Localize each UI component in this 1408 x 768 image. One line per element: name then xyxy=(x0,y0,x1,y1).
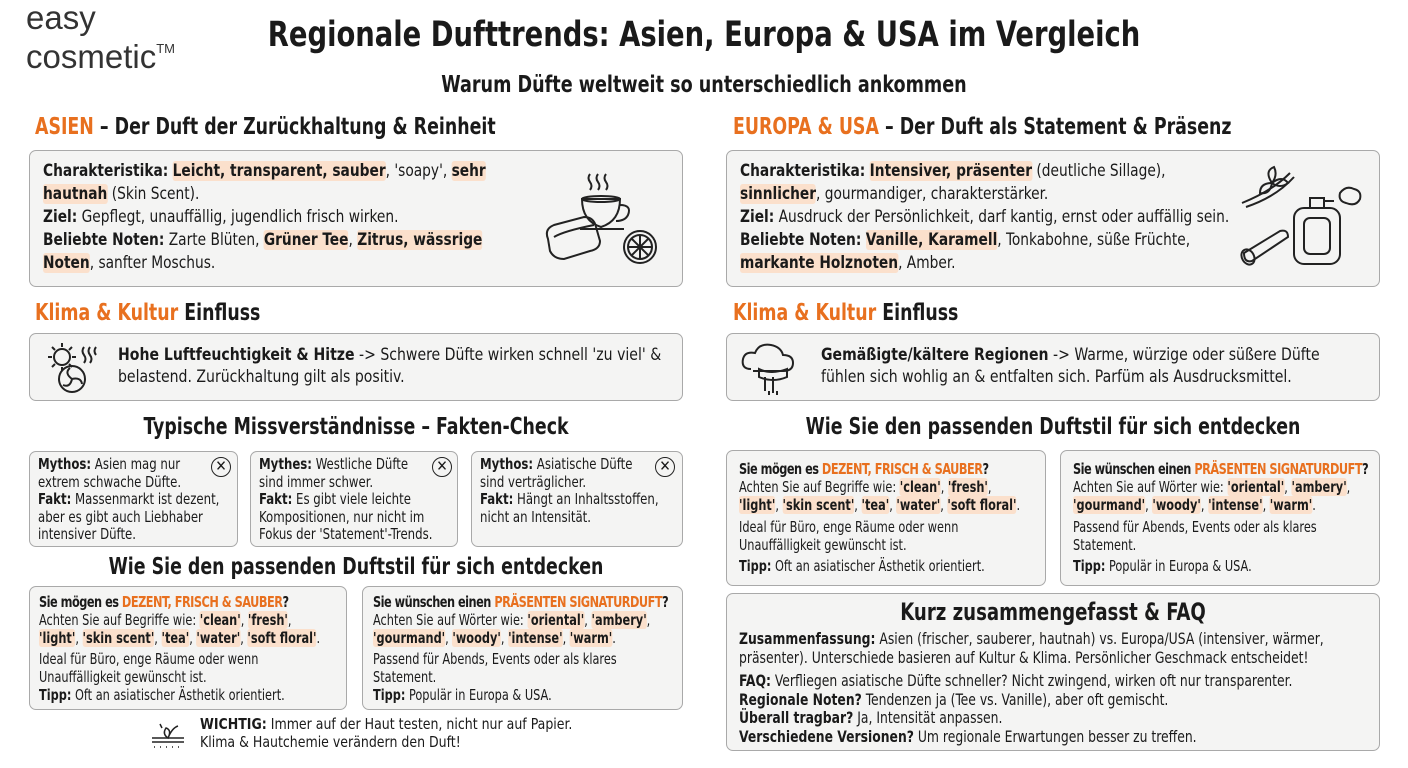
heading: Duftstil right: Wie Sie den passenden Duftstil für sich entdecken xyxy=(806,414,1300,440)
icon: x circle xyxy=(655,457,675,477)
box: präsent right xyxy=(1060,450,1380,586)
text: FAQ xyxy=(739,671,1292,746)
box: präsent left: Achten Sie auf Wörter wie: 'oriental', 'ambery', xyxy=(373,611,650,629)
box: dezent right: Tipp: Oft an asiatischer Ästhetik orientiert. xyxy=(739,557,985,575)
box: präsent left: Statement. xyxy=(373,668,436,686)
myth box 1 xyxy=(29,451,238,547)
text: Klima left: belastend. Zurückhaltung gilt als positiv. xyxy=(118,367,405,387)
box: dezent left: Ideal für Büro, enge Räume oder wenn xyxy=(39,650,258,668)
icon: sun and fan xyxy=(48,343,97,393)
subtitle: Warum Düfte weltweit so unterschiedlich ankommen xyxy=(441,72,967,98)
heading: Klima left: Klima & Kultur Einfluss xyxy=(35,300,260,326)
box: dezent right: 'light', 'skin scent', 'tea', 'water', 'soft floral'. xyxy=(739,496,1020,514)
heading: Europa: EUROPA & USA – Der Duft als Statement & Präsenz xyxy=(733,114,1232,140)
box: präsent right: Sie wünschen einen PRÄSENTEN SIGNATURDUFT? xyxy=(1073,460,1368,478)
text: Asien characteristics: Ziel: Gepflegt, unauffällig, jugendlich frisch wirken. xyxy=(43,207,398,227)
heading: Missverständnisse: Typische Missverständnisse – Fakten-Check xyxy=(143,414,569,440)
heading: Duftstil left: Wie Sie den passenden Duftstil für sich entdecken xyxy=(109,554,603,580)
icon: tea cup towel citrus xyxy=(546,173,657,264)
text: Europa characteristics: Ziel: Ausdruck der Persönlichkeit, darf kantig, ernst oder auffällig sein. xyxy=(740,207,1229,227)
myth box 1: Mythos: Asien mag nur xyxy=(38,455,180,473)
panel: Asien xyxy=(29,150,683,287)
box: dezent left: 'light', 'skin scent', 'tea', 'water', 'soft floral'. xyxy=(39,629,320,647)
text: Europa characteristics: Beliebte Noten: Vanille, Karamell, Tonkabohne, süße Früchte, xyxy=(740,230,1190,250)
logo: easy xyxy=(26,0,96,36)
box: dezent right: Unauffälligkeit gewünscht ist. xyxy=(739,536,907,554)
myth box 1: Fakt: Massenmarkt ist dezent, xyxy=(38,490,219,508)
text: FAQ: FAQ: Verfliegen asiatische Düfte schneller? Nicht zwingend, wirken oft nur transparenter. xyxy=(739,671,1292,690)
box: dezent left: Tipp: Oft an asiatischer Ästhetik orientiert. xyxy=(39,686,285,704)
heading: Klima right: Klima & Kultur Einfluss xyxy=(733,300,958,326)
myth box 2: Kompositionen, nur nicht im xyxy=(259,508,424,526)
box: präsent right: 'gourmand', 'woody', 'intense', 'warm'. xyxy=(1073,496,1316,514)
text: Europa characteristics: sinnlicher, gourmandiger, charakterstärker. xyxy=(740,184,1048,204)
myth box 2: Fakt: Es gibt viele leichte xyxy=(259,490,411,508)
box: präsent left: Sie wünschen einen PRÄSENTEN SIGNATURDUFT? xyxy=(373,593,668,611)
icon: x circle xyxy=(432,457,452,477)
text: Klima right: fühlen sich wohlig an & entfalten sich. Parfüm als Ausdrucksmittel. xyxy=(821,367,1292,387)
text: Klima right: Gemäßigte/kältere Regionen -> Warme, würzige oder süßere Düfte xyxy=(821,345,1320,365)
note: wichtig xyxy=(152,715,572,751)
box: dezent left: Achten Sie auf Begriffe wie: 'clean', 'fresh', xyxy=(39,611,291,629)
icon: x circle: ✕ xyxy=(436,457,448,475)
text: FAQ: Überall tragbar? Ja, Intensität anpassen. xyxy=(739,708,1002,727)
myth box 2: sind immer schwer. xyxy=(259,472,373,490)
note: wichtig: WICHTIG: Immer auf der Haut testen, nicht nur auf Papier. xyxy=(200,715,572,733)
panel: Klima right xyxy=(726,333,1380,401)
box: dezent right: Achten Sie auf Begriffe wie: 'clean', 'fresh', xyxy=(739,478,991,496)
heading: Asien: ASIEN – Der Duft der Zurückhaltung & Reinheit xyxy=(35,114,496,140)
box: dezent left xyxy=(29,586,347,710)
text: Klima left xyxy=(118,345,661,387)
panel: Klima left xyxy=(29,333,683,401)
panel: summary FAQ xyxy=(726,593,1380,751)
myth box 1: intensiver Düfte. xyxy=(38,525,136,543)
myth box 3: Fakt: Hängt an Inhaltsstoffen, xyxy=(480,490,659,508)
box: präsent right: Statement. xyxy=(1073,536,1136,554)
box: dezent right xyxy=(726,450,1046,586)
box: dezent right: Sie mögen es DEZENT, FRISCH & SAUBER? xyxy=(739,460,989,478)
myth box 3 xyxy=(471,451,683,547)
myth box 3: Mythos: Asiatische Düfte xyxy=(480,455,632,473)
myth box 3: sind verträglicher. xyxy=(480,472,586,490)
title: Regionale Dufttrends: Asien, Europa & USA im Vergleich xyxy=(268,15,1140,55)
text: summary: präsenter). Unterschiede basieren auf Kultur & Klima. Persönlicher Geschmack entscheidet! xyxy=(739,648,1308,667)
icon: cloud scarf xyxy=(742,344,794,395)
box: präsent left: Tipp: Populär in Europa & USA. xyxy=(373,686,552,704)
text: Klima right xyxy=(821,345,1320,387)
text: Asien characteristics xyxy=(43,161,486,273)
text: FAQ: Regionale Noten? Tendenzen ja (Tee vs. Vanille), aber oft gemischt. xyxy=(739,690,1168,708)
myth box 2: Fokus der 'Statement'-Trends. xyxy=(259,525,432,543)
text: Asien characteristics: Noten, sanfter Moschus. xyxy=(43,253,215,273)
box: präsent left: 'gourmand', 'woody', 'intense', 'warm'. xyxy=(373,629,616,647)
text: Europa characteristics xyxy=(740,161,1229,273)
text: Europa characteristics: markante Holznoten, Amber. xyxy=(740,253,955,273)
myth box 1: aber es gibt auch Liebhaber xyxy=(38,508,203,526)
text: Europa characteristics: Charakteristika: Intensiver, präsenter (deutliche Sillage), xyxy=(740,161,1166,181)
text: Asien characteristics: hautnah (Skin Scent). xyxy=(43,184,199,204)
icon: x circle: ✕ xyxy=(215,457,227,475)
myth box 3: nicht an Intensität. xyxy=(480,508,591,526)
box: präsent right: Tipp: Populär in Europa & USA. xyxy=(1073,557,1252,575)
box: präsent right: Passend für Abends, Events oder als klares xyxy=(1073,518,1317,536)
text: FAQ: Verschiedene Versionen? Um regionale Erwartungen besser zu treffen. xyxy=(739,726,1197,746)
box: dezent right: Ideal für Büro, enge Räume oder wenn xyxy=(739,518,958,536)
myth box 2: Mythes: Westliche Düfte xyxy=(259,455,408,473)
myth box 2 xyxy=(250,451,458,547)
text: Asien characteristics: Charakteristika: Leicht, transparent, sauber, 'soapy', sehr xyxy=(43,161,486,181)
text: Asien characteristics: Beliebte Noten: Zarte Blüten, Grüner Tee, Zitrus, wässrige xyxy=(43,230,482,250)
box: dezent left: Unauffälligkeit gewünscht ist. xyxy=(39,668,207,686)
icon: x circle: ✕ xyxy=(659,457,671,475)
panel: Europa xyxy=(726,150,1380,287)
text: summary xyxy=(739,629,1324,667)
heading: Kurz zusammengefasst: Kurz zusammengefasst & FAQ xyxy=(900,598,1206,626)
icon: x circle xyxy=(211,457,231,477)
text: Klima left: Hohe Luftfeuchtigkeit & Hitze -> Schwere Düfte wirken schnell 'zu viel' & xyxy=(118,345,661,365)
myth box 1: extrem schwache Düfte. xyxy=(38,472,181,490)
icon: skin plant xyxy=(152,724,184,748)
logo: cosmeticTM xyxy=(26,38,175,75)
icon: vanilla perfume wood xyxy=(1240,166,1362,266)
logo xyxy=(26,0,175,75)
box: präsent left: Passend für Abends, Events oder als klares xyxy=(373,650,617,668)
box: dezent left: Sie mögen es DEZENT, FRISCH & SAUBER? xyxy=(39,593,289,611)
note: wichtig: Klima & Hautchemie verändern den Duft! xyxy=(200,733,461,751)
text: summary: Zusammenfassung: Asien (frischer, sauberer, hautnah) vs. Europa/USA (intensiver, wärmer, xyxy=(739,629,1324,648)
box: präsent left xyxy=(362,586,683,710)
box: präsent right: Achten Sie auf Wörter wie: 'oriental', 'ambery', xyxy=(1073,478,1350,496)
